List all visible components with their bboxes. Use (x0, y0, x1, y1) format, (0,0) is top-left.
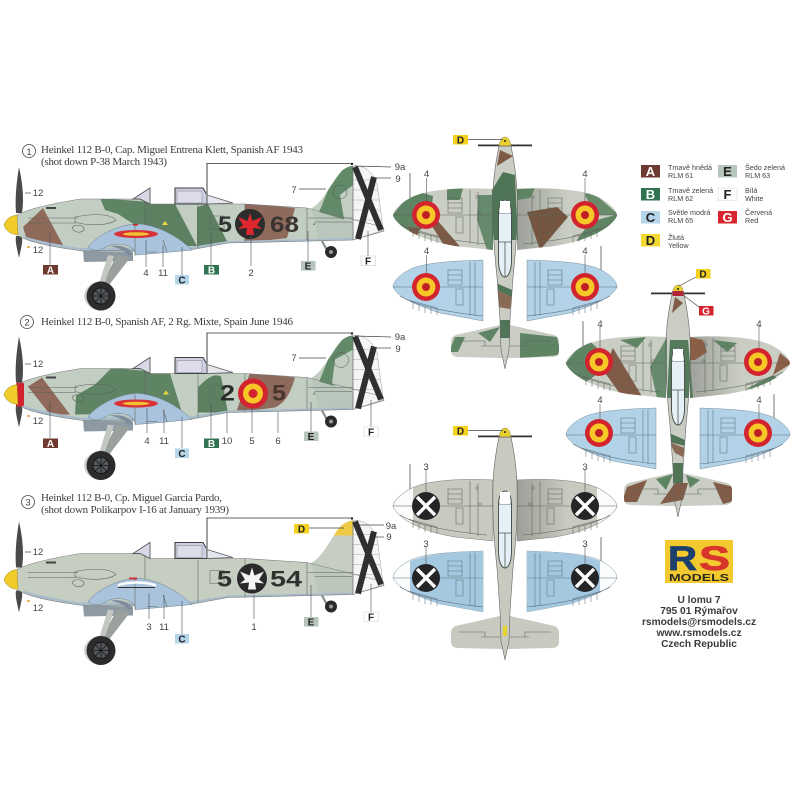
aircraft 2 top and underside views (564, 285, 792, 517)
callouts: scheme 2 (25, 332, 406, 460)
colour legend: Yellow (668, 241, 689, 250)
callouts: scheme 2: E (308, 432, 315, 443)
callouts: scheme 1: E (305, 262, 312, 272)
aircraft 2 side view: 5 (272, 380, 286, 406)
callouts: scheme 3: 12 (33, 603, 43, 614)
callouts: scheme 2: 9 (395, 344, 401, 355)
aircraft 3 top and underside views: 3 (582, 539, 588, 550)
logo: RS Models: S (699, 540, 730, 578)
colour legend: RLM 63 (745, 171, 770, 180)
callouts: scheme 3: 3 (146, 622, 152, 633)
address block: Czech Republic (661, 639, 737, 650)
callouts: scheme 2: C (178, 449, 186, 460)
callouts: scheme 1: 9 (395, 174, 401, 185)
heading: scheme 3: (shot down Polikarpov I-16 at January 1939) (41, 504, 229, 516)
callouts: scheme 2: 7 (291, 353, 297, 364)
callouts: scheme 2: 12 (33, 416, 43, 427)
colour legend: Červená (745, 208, 772, 217)
heading: scheme 3: Heinkel 112 B-0, Cp. Miguel Garcia Pardo, (41, 492, 222, 504)
aircraft 2 side view (4, 332, 384, 480)
aircraft 2 top and underside views: 4 (597, 395, 603, 406)
callouts: scheme 1: 11 (158, 268, 168, 279)
address block (642, 595, 756, 650)
paint callouts for aircraft 2: D and G: G (702, 306, 710, 318)
heading: scheme 2: 2 (24, 318, 30, 328)
callouts: scheme 2: 4 (144, 436, 150, 447)
callouts: scheme 2: 11 (159, 436, 169, 447)
callouts: scheme 3: C (178, 634, 186, 646)
colour legend: RLM 65 (668, 216, 693, 225)
callouts: scheme 2: 9a (395, 332, 406, 343)
colour legend: Šedo zelená (745, 163, 785, 172)
callouts: scheme 1: 7 (291, 185, 297, 196)
aircraft 1 side view: 5 (218, 212, 232, 237)
colour legend: Tmavě hnědá (668, 163, 712, 172)
aircraft 3 top and underside views: 3 (423, 539, 429, 550)
callouts: scheme 1: F (365, 256, 371, 268)
colour legend: G (722, 210, 733, 225)
aircraft 2 top and underside views: 4 (756, 319, 762, 330)
aircraft 2 top and underside views: 4 (756, 395, 762, 406)
aircraft 1 top and underside views: 4 (424, 246, 429, 257)
colour legend: B (646, 187, 655, 202)
callouts: scheme 2: B (208, 439, 215, 450)
logo: RS Models (665, 540, 733, 584)
aircraft 2 side view: 2 (220, 380, 235, 406)
callouts: scheme 2: A (47, 439, 54, 450)
callouts: scheme 2: 12 (33, 359, 43, 370)
colour legend: Světle modrá (668, 208, 710, 217)
address block: 795 01 Rýmařov (660, 606, 738, 617)
address block: rsmodels@rsmodels.cz (642, 617, 756, 628)
colour legend: RLM 61 (668, 171, 693, 180)
callouts: scheme 3 (25, 521, 397, 646)
colour legend: Bílá (745, 186, 757, 195)
callouts: scheme 3: E (308, 618, 315, 628)
callouts: scheme 1: B (208, 266, 215, 276)
aircraft 1 side view: 68 (270, 212, 299, 237)
colour legend: F (724, 187, 732, 202)
heading: scheme 3: 3 (25, 498, 31, 508)
address block: U lomu 7 (677, 595, 721, 606)
callouts: scheme 3: F (368, 612, 374, 624)
aircraft 3 top and underside views: 3 (582, 462, 588, 473)
paint callouts for aircraft 2: D and G (679, 269, 714, 318)
colour legend: A (646, 164, 656, 179)
heading: scheme 1: (shot down P-38 March 1943) (41, 156, 167, 168)
colour legend: White (745, 194, 763, 203)
callouts: scheme 2: 5 (249, 436, 255, 447)
callouts: scheme 3: D (298, 524, 305, 536)
heading: scheme 1: 1 (26, 147, 32, 158)
callouts: scheme 1: C (178, 276, 186, 286)
colour legend: Red (745, 216, 758, 225)
callouts: scheme 1: A (47, 266, 54, 276)
callouts: scheme 2: 10 (222, 436, 232, 447)
aircraft 3 side view (4, 517, 384, 666)
colour legend: Žlutá (668, 233, 684, 242)
heading: scheme 3 (22, 492, 229, 516)
callouts: scheme 3: 1 (251, 622, 257, 633)
callouts: scheme 3: 9a (386, 521, 397, 532)
aircraft 1 top and underside views: 4 (582, 246, 588, 257)
aircraft 3 side view: 54 (270, 566, 303, 592)
paint callouts for aircraft 2: D and G: D (699, 270, 707, 280)
callouts: scheme 3: 11 (159, 622, 169, 633)
callouts: scheme 1: 2 (248, 268, 254, 279)
aircraft 1 side view (4, 163, 384, 311)
aircraft 3 top and underside views (391, 426, 619, 660)
aircraft 1 top and underside views (391, 135, 619, 369)
aircraft 1 top and underside views: D (457, 136, 464, 146)
callouts: scheme 2: 6 (275, 436, 281, 447)
callouts: scheme 3: 9 (386, 532, 392, 543)
heading: scheme 2: Heinkel 112 B-0, Spanish AF, 2 Rg. Mixte, Spain June 1946 (41, 316, 294, 328)
colour legend (641, 163, 785, 250)
aircraft 1 top and underside views: 4 (582, 169, 588, 180)
heading: scheme 1 (22, 144, 304, 168)
callouts: scheme 1: 4 (143, 268, 149, 279)
callouts: scheme 1 (25, 162, 406, 286)
colour legend: C (646, 210, 656, 225)
callouts: scheme 1: 12 (33, 188, 43, 199)
heading: scheme 1: Heinkel 112 B-0, Cap. Miguel Entrena Klett, Spanish AF 1943 (41, 144, 304, 156)
aircraft 3 side view: 5 (217, 566, 232, 592)
aircraft 2 top and underside views: 4 (597, 319, 603, 330)
colour legend: RLM 62 (668, 194, 693, 203)
aircraft 1 top and underside views: 4 (424, 169, 429, 180)
callouts: scheme 2: F (368, 428, 374, 438)
logo: RS Models: MODELS (669, 573, 729, 584)
colour legend: D (646, 233, 655, 248)
aircraft 3 top and underside views: 3 (423, 462, 429, 473)
address block: www.rsmodels.cz (655, 628, 742, 639)
callouts: scheme 3: 12 (33, 547, 43, 558)
colour legend: Tmavě zelená (668, 186, 713, 195)
callouts: scheme 1: 12 (33, 245, 43, 256)
aircraft 3 top and underside views: D (457, 426, 464, 438)
colour legend: E (723, 164, 732, 179)
callouts: scheme 1: 9a (395, 162, 406, 173)
logo: RS Models: R (668, 540, 697, 578)
